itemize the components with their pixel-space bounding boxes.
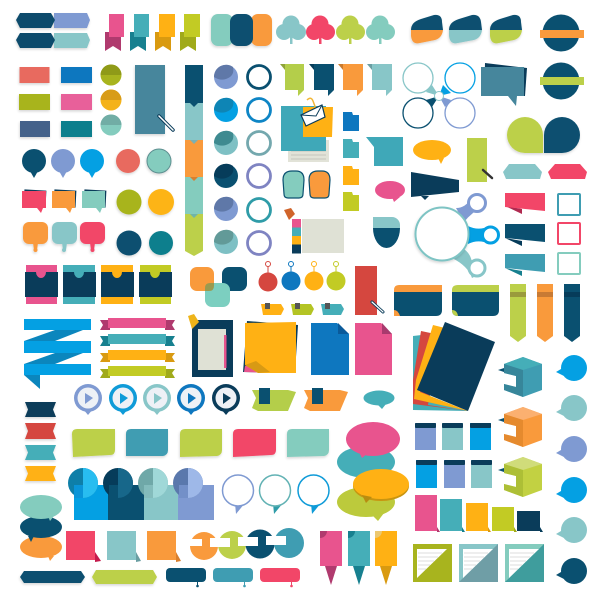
small pads row two <box>416 460 492 488</box>
navy cards with coloured top <box>394 285 499 316</box>
isometric cube orange <box>498 407 542 447</box>
rounded tabs trio <box>211 14 272 46</box>
map pins row <box>22 149 104 178</box>
lime note with clip <box>467 138 492 182</box>
speech ellipse stack left <box>20 495 62 561</box>
ring speech balloons <box>222 475 329 514</box>
play buttons row <box>74 384 240 415</box>
outlined rounded pads <box>283 171 330 198</box>
notes with envelope <box>281 98 333 162</box>
navy and teal circles <box>116 230 173 256</box>
folded flags <box>280 64 392 96</box>
coloured rectangles <box>19 67 92 137</box>
skewed ribbon tags <box>252 388 348 411</box>
blue document <box>311 323 349 375</box>
small hexagons <box>503 164 587 179</box>
bottom hexagon bars <box>20 570 157 584</box>
half circle two tone <box>373 217 400 248</box>
isometric cube teal <box>498 357 542 397</box>
pink bubble <box>375 181 405 202</box>
hanging tags <box>258 262 346 292</box>
split circles <box>100 64 122 136</box>
framed pinned note <box>188 314 233 377</box>
small pads row one <box>415 423 491 450</box>
fan of sheets <box>413 322 495 411</box>
lime and navy double blob <box>507 117 580 153</box>
pinned note with stripes <box>284 208 344 254</box>
rings column <box>248 66 270 254</box>
speech circles right column <box>556 355 587 584</box>
olive and amber tabs <box>116 189 174 215</box>
vertical arrow flags <box>510 284 580 342</box>
ribbon banners stack <box>100 318 175 378</box>
corner tail squares <box>66 531 181 562</box>
speech ellipse stack centre <box>337 422 409 521</box>
small arrow tags <box>261 303 344 315</box>
big node circle <box>416 194 498 278</box>
zig-zag ribbon <box>24 319 91 389</box>
speech notes row <box>22 189 106 213</box>
steel note with paperclip <box>135 65 173 134</box>
rounded cards row <box>72 429 329 457</box>
vertical step strip <box>185 65 203 256</box>
isometric cube lime <box>498 457 542 497</box>
red note with clip <box>355 266 383 315</box>
small folders <box>343 112 359 211</box>
two tone blobs <box>411 15 522 43</box>
pointed pin cards <box>320 531 397 585</box>
circle with orange band <box>540 14 584 52</box>
teal flag speech <box>366 137 403 166</box>
descending bars <box>415 495 543 532</box>
chain of circles <box>184 528 304 560</box>
amber sticky note <box>243 321 298 373</box>
pink document <box>355 323 392 375</box>
rounded speech tags <box>23 222 105 252</box>
four circle diagram <box>403 63 475 128</box>
fold blocks with half circles <box>68 468 214 520</box>
coral and mint circles <box>116 149 171 173</box>
steel speech box <box>481 63 527 106</box>
amber bubble <box>413 140 451 164</box>
circle with lime band <box>540 62 584 100</box>
shaded circles column <box>214 65 238 254</box>
teal small bubble <box>364 390 394 409</box>
ribbon bookmarks <box>105 14 200 51</box>
notched side banners <box>25 402 56 481</box>
club shaped icons <box>276 16 395 44</box>
square frames <box>558 194 580 274</box>
navy trapezoid tag <box>411 172 459 200</box>
bottom rounded tags <box>166 568 300 587</box>
folded labels <box>505 193 545 276</box>
hexagon banners <box>16 13 90 48</box>
notched pockets row <box>25 265 172 304</box>
overlapping rounded squares <box>190 267 247 307</box>
diagonal note squares <box>413 544 544 582</box>
